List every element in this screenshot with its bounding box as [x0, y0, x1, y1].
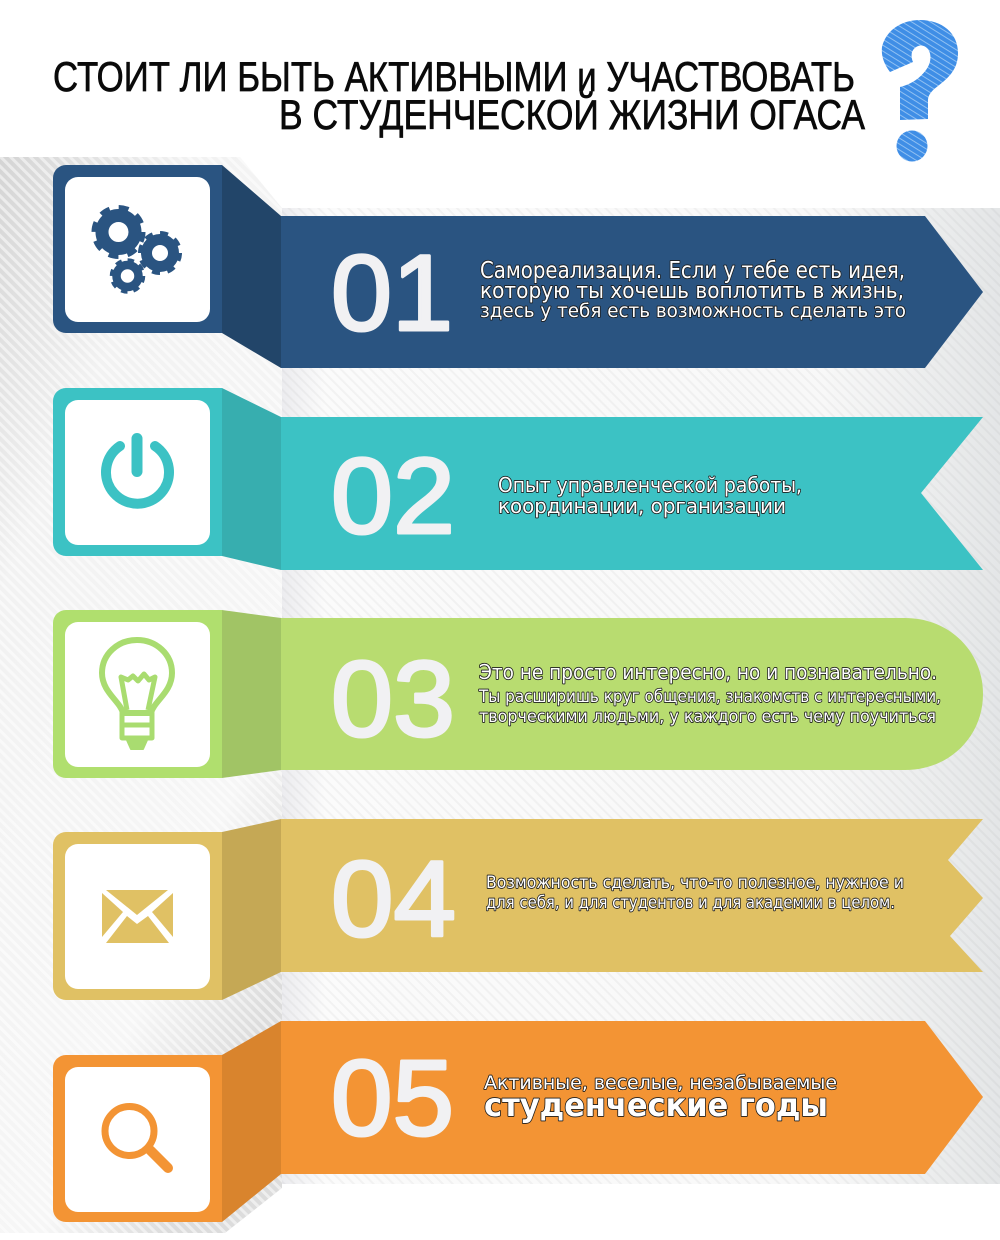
icon: magnifier [105, 1106, 168, 1168]
text 05: студенческие годы [484, 1086, 828, 1124]
icon frame 01 [65, 177, 210, 322]
text 04: для себя, и для студентов и для академии в целом. [486, 893, 895, 913]
fold 02 [222, 388, 281, 570]
icon frame 03 [65, 622, 210, 767]
text 02: Опыт управленческой работы, [498, 473, 802, 497]
panel: item 02 [53, 388, 983, 570]
text 04 [486, 873, 904, 913]
icon: gears [94, 208, 180, 292]
icon: envelope [102, 890, 173, 943]
ribbon 01 [281, 216, 983, 368]
ribbon 02 [281, 417, 983, 570]
icon box 03 [53, 610, 222, 778]
text 03: творческими людьми, у каждого есть чему поучиться [479, 707, 936, 727]
ribbon 04 [281, 819, 983, 972]
text 03: Ты расширишь круг общения, знакомств с интересными, [478, 687, 941, 707]
number 01: 01 [331, 232, 453, 353]
title: В СТУДЕНЧЕСКОЙ ЖИЗНИ ОГАСА [279, 90, 865, 138]
icon box 01 [53, 165, 222, 333]
panel: item 05 [53, 1021, 983, 1222]
text 03: Это не просто интересно, но и познавательно. [479, 660, 937, 684]
icon: question mark [882, 20, 958, 162]
icon box 02 [53, 388, 222, 556]
title [53, 53, 865, 138]
number 05: 05 [331, 1037, 454, 1158]
text 05: Активные, веселые, незабываемые [484, 1072, 837, 1094]
fold 01 [222, 165, 281, 368]
number 02: 02 [331, 435, 455, 556]
panel: item 01 [53, 165, 983, 368]
title: СТОИТ ЛИ БЫТЬ АКТИВНЫМИ и УЧАСТВОВАТЬ [53, 53, 855, 100]
text 03 [478, 660, 941, 727]
ribbon 05 [281, 1021, 983, 1174]
text 01: которую ты хочешь воплотить в жизнь, [480, 279, 904, 304]
ribbon 03 [281, 618, 983, 770]
fold 04 [222, 819, 281, 1000]
icon: light bulb [102, 640, 172, 749]
icon box 04 [53, 832, 222, 1000]
text 01: здесь у тебя есть возможность сделать это [480, 300, 906, 322]
text 02 [498, 473, 802, 518]
text 02: координации, организации [498, 494, 786, 518]
fold 03 [222, 610, 281, 778]
icon box 05 [53, 1055, 222, 1222]
panel: item 04 [53, 819, 983, 1000]
icon frame 02 [65, 400, 210, 545]
icon: power [106, 438, 169, 504]
icon frame 05 [65, 1067, 210, 1212]
icon frame 04 [65, 844, 210, 989]
panel: item 03 [53, 610, 983, 778]
number 03: 03 [331, 638, 455, 759]
text 01 [480, 258, 906, 322]
number 04: 04 [331, 838, 456, 959]
fold 05 [222, 1021, 281, 1222]
text 04: Возможность сделать, что-то полезное, нужное и [486, 873, 904, 893]
text 01: Самореализация. Если у тебе есть идея, [480, 258, 905, 284]
